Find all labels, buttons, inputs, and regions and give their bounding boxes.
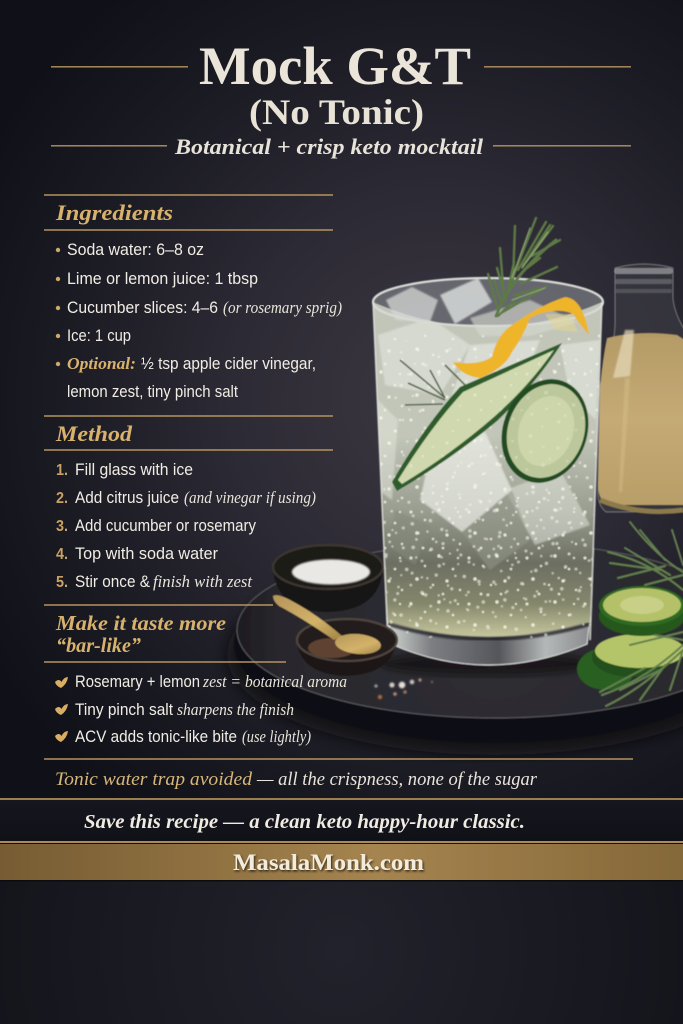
ingredient list: ½ tsp apple cider vinegar, bbox=[141, 355, 316, 373]
rosemary on tray bbox=[600, 522, 683, 706]
tips list: zest = bbox=[202, 672, 241, 691]
salt scatter bbox=[375, 679, 433, 699]
tips list: Rosemary + lemon bbox=[75, 673, 200, 691]
method steps: Stir once & bbox=[75, 573, 150, 591]
ingredient list: lemon zest, tiny pinch salt bbox=[67, 383, 238, 401]
ingredient list: (or rosemary sprig) bbox=[223, 298, 342, 317]
pepper bowl and spoon bbox=[273, 595, 397, 676]
method steps: Add cucumber or rosemary bbox=[75, 517, 257, 535]
method steps: Fill glass with ice bbox=[75, 461, 193, 479]
glass rim and upper ice bbox=[373, 278, 603, 640]
footer band: website: MasalaMonk.com bbox=[233, 850, 424, 875]
icon: check 2 bbox=[55, 704, 68, 715]
panel: make it taste more bar-like bbox=[44, 605, 347, 746]
callout: tonic water trap bbox=[44, 759, 633, 790]
lemon twist bbox=[453, 297, 589, 378]
panel: ingredients bbox=[44, 195, 342, 401]
ingredient list bbox=[56, 241, 342, 401]
cucumber round slice bbox=[487, 367, 603, 495]
salt bowl bbox=[273, 545, 383, 612]
cucumber slices on tray bbox=[577, 586, 683, 690]
cucumber wedge bbox=[392, 343, 562, 491]
ice cubes bbox=[378, 318, 600, 570]
tips list: botanical aroma bbox=[245, 672, 347, 691]
submerged rosemary bbox=[400, 360, 465, 405]
method steps: 3. bbox=[56, 518, 68, 535]
ingredient list: Soda water: 6–8 oz bbox=[67, 241, 204, 259]
tips list bbox=[55, 672, 347, 746]
callout: tonic water trap: — all the crispness, none of the sugar bbox=[256, 770, 538, 790]
method steps: 2. bbox=[56, 490, 68, 507]
tips list: sharpens the finish bbox=[177, 700, 294, 719]
method steps: (and vinegar if using) bbox=[184, 488, 316, 507]
illustration: mocktail scene bbox=[227, 218, 683, 755]
method steps: 4. bbox=[56, 546, 68, 563]
method steps: 1. bbox=[56, 462, 68, 479]
subtitle: no tonic: (No Tonic) bbox=[249, 92, 424, 132]
bottle bbox=[598, 264, 683, 512]
heading: bar-like: Make it taste more bbox=[55, 611, 226, 635]
tips list: Tiny pinch salt bbox=[75, 701, 173, 719]
tips list: (use lightly) bbox=[242, 727, 311, 746]
ingredient list: Optional: bbox=[67, 354, 136, 373]
icon: check 3 bbox=[55, 731, 68, 742]
heading: bar-like bbox=[55, 611, 226, 657]
method steps: Add citrus juice bbox=[75, 489, 179, 507]
banner: save this recipe bbox=[0, 798, 683, 843]
tagline: Botanical + crisp keto mocktail bbox=[174, 134, 484, 159]
method steps bbox=[56, 461, 316, 591]
title block bbox=[51, 36, 631, 159]
ingredient list: Cucumber slices: 4–6 bbox=[67, 299, 218, 317]
method steps: Top with soda water bbox=[75, 545, 218, 563]
heading: ingredients: Ingredients bbox=[55, 200, 173, 225]
rosemary sprig in glass bbox=[488, 218, 560, 316]
icon: check 1 bbox=[55, 677, 68, 688]
glass bbox=[367, 278, 620, 676]
ingredient list: Lime or lemon juice: 1 tbsp bbox=[67, 270, 258, 288]
method steps: 5. bbox=[56, 574, 68, 591]
callout: tonic water trap: Tonic water trap avoided bbox=[55, 770, 253, 790]
heading: method: Method bbox=[55, 421, 133, 446]
tray bbox=[227, 542, 683, 755]
footer band: website bbox=[0, 844, 683, 882]
title: Mock G&T bbox=[199, 36, 471, 96]
heading: bar-like: “bar-like” bbox=[56, 633, 141, 657]
tips list: ACV adds tonic-like bite bbox=[75, 728, 237, 746]
banner: save this recipe: Save this recipe — a clean keto happy-hour classic. bbox=[84, 811, 525, 833]
ingredient list: Ice: 1 cup bbox=[67, 327, 131, 345]
panel: method bbox=[44, 416, 333, 591]
method steps: finish with zest bbox=[153, 572, 252, 591]
